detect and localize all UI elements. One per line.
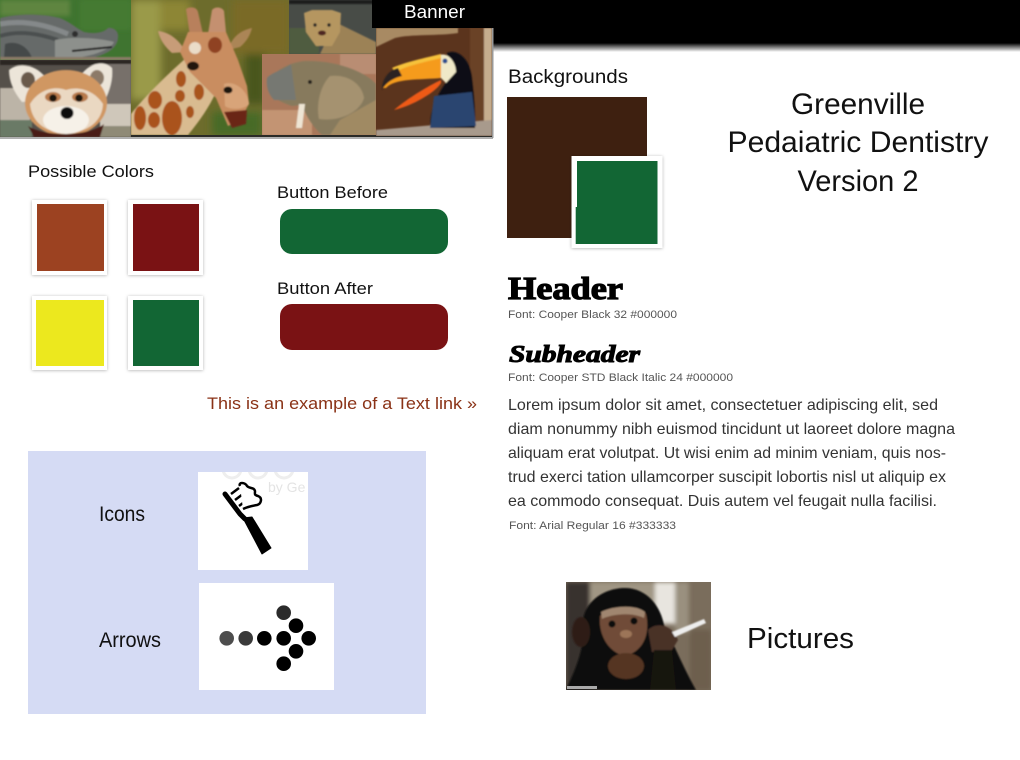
sample: body text: Lorem ipsum dolor sit amet, consectetuer adipiscing elit, sed <box>508 397 938 414</box>
heading: possible colors: Possible Colors <box>28 162 154 181</box>
sample: subheader: Subheader <box>509 342 641 368</box>
banner photo collage <box>0 0 494 139</box>
sample: subheader: Font: Cooper STD Black Italic 24 #000000 <box>508 372 733 384</box>
label: arrows: Arrows <box>99 629 161 652</box>
photo: leopard <box>289 0 376 54</box>
swatch: green background <box>572 156 662 248</box>
sample: body text: Font: Arial Regular 16 #333333 <box>509 520 676 532</box>
sample: header: Header <box>508 270 623 306</box>
photo: elephant <box>262 54 376 135</box>
heading: backgrounds: Backgrounds <box>508 67 628 88</box>
button before <box>280 209 448 254</box>
swatch: rust <box>32 200 107 275</box>
banner label <box>372 0 493 28</box>
sample: body text: diam nonummy nibh euismod tincidunt ut laoreet dolore magna <box>508 421 955 438</box>
photo: giraffe <box>131 0 289 136</box>
sample: body text <box>508 397 955 532</box>
photo: red panda <box>0 60 131 137</box>
sample: body text: ea commodo consequat. Duis autem vel feugait nulla facilisi. <box>508 493 937 510</box>
text link example: This is an example of a Text link » <box>207 394 477 413</box>
label: icons: Icons <box>99 503 145 526</box>
photo: crocodile <box>0 0 131 60</box>
sample: subheader <box>508 342 733 384</box>
swatch: yellow <box>32 296 107 370</box>
title <box>728 88 988 198</box>
icon: toothbrush: by Ge <box>268 479 306 495</box>
label: button before: Button Before <box>277 183 388 202</box>
swatch: green <box>128 296 203 370</box>
button after <box>280 304 448 350</box>
banner label: Banner <box>404 2 465 22</box>
swatch: brown background <box>507 97 647 238</box>
photo: toucan <box>376 28 492 136</box>
panel: icons and arrows <box>28 451 426 714</box>
top black bar <box>493 0 1020 52</box>
label: button after: Button After <box>277 279 373 298</box>
sample: header: Font: Cooper Black 32 #000000 <box>508 309 677 321</box>
background swatches <box>507 97 662 248</box>
title: Version 2 <box>798 165 918 198</box>
sample: header <box>508 270 677 321</box>
icon: toothbrush <box>198 472 308 570</box>
photo: chimpanzee <box>566 582 711 690</box>
swatch: maroon <box>128 200 203 275</box>
title: Greenville <box>791 88 925 121</box>
sample: body text: aliquam erat volutpat. Ut wisi enim ad minim veniam, quis nos- <box>508 445 946 462</box>
sample: body text: trud exerci tation ullamcorper suscipit lobortis nisl ut aliquip ex <box>508 469 946 486</box>
title: Pedaiatric Dentistry <box>728 126 988 159</box>
icon: dotted arrow <box>199 583 334 690</box>
label: pictures: Pictures <box>747 623 854 655</box>
